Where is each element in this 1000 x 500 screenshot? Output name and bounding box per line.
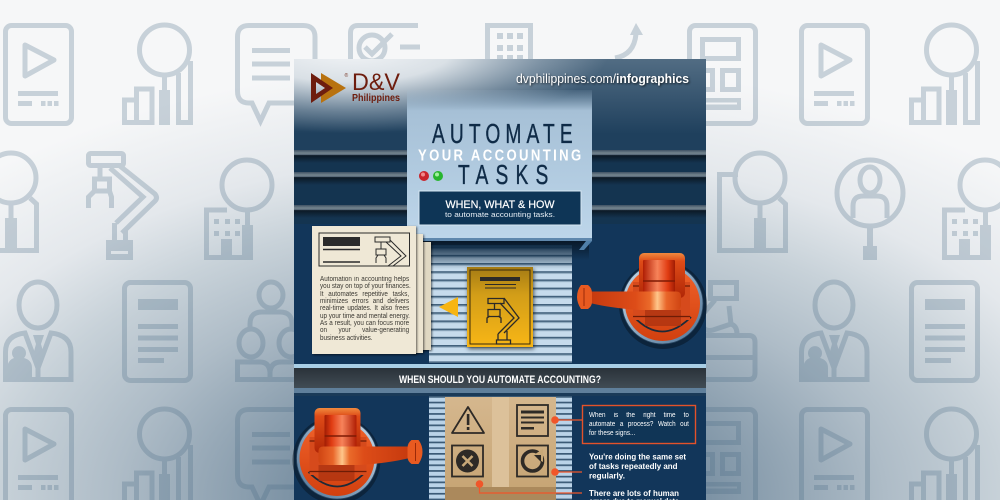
intro paragraph: As a result, you can focus more	[320, 320, 409, 327]
top lever	[577, 253, 707, 349]
section banner	[294, 364, 706, 396]
logo	[311, 69, 400, 104]
stacked paper	[312, 226, 431, 354]
sign two text: There are lots of human	[589, 489, 679, 498]
title plate	[407, 90, 592, 250]
intro paragraph: Automation in accounting helps	[320, 276, 409, 283]
subtitle box: to automate accounting tasks.	[445, 210, 555, 219]
poster panel	[292, 59, 707, 500]
intro paragraph: up your time and mental energy.	[320, 313, 410, 320]
website url: dvphilippines.com/infographics	[516, 71, 689, 86]
logo: D&V	[352, 69, 400, 96]
logo: ®	[344, 72, 348, 79]
bottom lever	[292, 408, 422, 500]
paper header icon box	[319, 233, 410, 266]
sign one text: of tasks repeatedly and	[589, 462, 678, 471]
intro paragraph: real-time updates. It also frees	[320, 305, 409, 312]
callout text: When is the right time to	[589, 412, 689, 419]
connector lines	[476, 416, 582, 493]
yellow sign	[467, 267, 533, 347]
section banner: WHEN SHOULD YOU AUTOMATE ACCOUNTING?	[399, 374, 601, 386]
intro paragraph	[320, 276, 411, 342]
intro paragraph: you stay on top of your finances.	[320, 283, 411, 290]
title line: tasks: TASKS	[458, 161, 548, 191]
roller shutter upper	[429, 245, 572, 363]
pointer arrow	[439, 297, 458, 317]
callout text: automate a process? Watch out	[589, 421, 689, 428]
icon: document	[517, 405, 548, 436]
intro paragraph: on your value-generating	[320, 327, 409, 334]
intro paragraph: It automates repetitive tasks,	[320, 291, 409, 298]
sign one text: regularly.	[589, 472, 625, 480]
subtitle box: WHEN, WHAT & HOW	[446, 199, 555, 211]
sign one text	[589, 452, 686, 480]
subtitle box	[419, 191, 581, 225]
roller shutter lower	[429, 396, 572, 500]
intro paragraph: business activities.	[320, 334, 373, 342]
logo: Philippines	[352, 92, 400, 104]
icon: warning	[452, 407, 484, 433]
icon: cancel	[452, 446, 483, 476]
sign one text: You're doing the same set	[589, 452, 686, 462]
panel shadow below title	[409, 240, 589, 260]
icon: refresh	[517, 446, 548, 476]
callout text: for these signs...	[589, 430, 635, 437]
title line: automate: AUTOMATE	[432, 120, 573, 150]
intro paragraph: minimizes errors and delivers	[320, 298, 409, 305]
shutter slats	[294, 150, 706, 218]
indicator lights	[419, 171, 443, 181]
cardboard box	[445, 397, 556, 500]
callout text	[589, 412, 689, 437]
callout box	[582, 406, 696, 444]
title line: your accounting: YOUR ACCOUNTING	[418, 147, 581, 165]
